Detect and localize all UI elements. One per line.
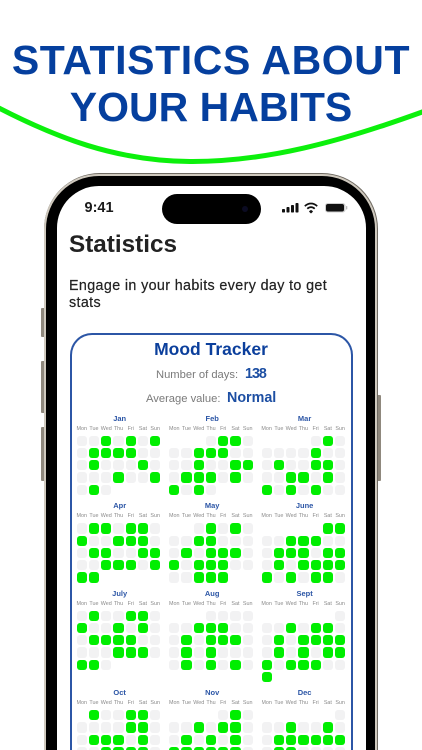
calendar: February: Sun (243, 426, 253, 432)
intro text: Engage in your habits every day to get (69, 278, 327, 294)
camera lens (242, 206, 248, 212)
calendar: January: Sat (139, 426, 147, 432)
calendar: July: July (112, 589, 127, 598)
calendar: July: Thu (114, 601, 123, 607)
calendar: April: Wed (101, 513, 112, 519)
calendar: June: Wed (286, 513, 297, 519)
calendar: June: Tue (274, 513, 283, 519)
calendar: August (169, 589, 253, 670)
calendar: February: Thu (206, 426, 216, 432)
calendar: April: Tue (89, 513, 99, 519)
calendar: March: Mar (298, 414, 311, 423)
number of days value: 138 (245, 366, 266, 382)
calendar: January: Thu (114, 426, 123, 432)
calendar: November: Thu (206, 700, 216, 706)
left side button: volume up (41, 361, 46, 413)
calendar: November: Wed (193, 700, 204, 706)
calendar: November: Sat (231, 700, 240, 706)
calendar: January: Mon (76, 426, 87, 432)
calendar: November: Mon (169, 700, 179, 706)
calendar: September: Wed (286, 601, 297, 607)
calendar: January: Wed (101, 426, 112, 432)
calendar: August: Sun (243, 601, 253, 607)
calendar: April: Fri (128, 513, 134, 519)
calendar: July: Sun (150, 601, 160, 607)
calendar: June (261, 501, 345, 583)
calendar: April (76, 501, 160, 583)
calendar: January: Sun (150, 426, 160, 432)
calendar: May: Wed (193, 513, 204, 519)
heading line 2: YOUR HABITS (70, 84, 352, 130)
intro text (69, 278, 327, 311)
average value label: Average value: (146, 393, 220, 405)
calendar: August: Tue (182, 601, 191, 607)
calendar: February (169, 414, 253, 495)
calendar: June: Sun (335, 513, 345, 519)
black bezel (46, 176, 375, 750)
calendar: March: Wed (286, 426, 297, 432)
calendar: October: Sun (150, 700, 160, 706)
calendar: December: Sat (324, 700, 332, 706)
calendar: September: Sun (335, 601, 345, 607)
calendar: February: Tue (182, 426, 191, 432)
calendar: May: Thu (206, 513, 216, 519)
metal band (44, 174, 377, 750)
calendar: March: Fri (312, 426, 319, 432)
calendar: August: Wed (193, 601, 204, 607)
dynamic island (162, 194, 260, 224)
calendar: December: Tue (274, 700, 283, 706)
calendar: May: Mon (169, 513, 179, 519)
calendar: October: Fri (128, 700, 134, 706)
calendar: August: Fri (220, 601, 226, 607)
calendar: December: Fri (312, 700, 319, 706)
average value: Normal (227, 390, 276, 406)
calendar: June: Mon (261, 513, 272, 519)
calendar: September: Fri (312, 601, 319, 607)
calendar: August: Thu (206, 601, 216, 607)
calendar: August: Aug (205, 589, 219, 598)
panel: mood tracker card (70, 332, 353, 750)
calendar: January: Fri (128, 426, 134, 432)
calendar: February: Feb (206, 414, 219, 423)
calendar: March (261, 414, 345, 495)
calendar: May: Fri (220, 513, 226, 519)
calendar: December: Dec (298, 688, 311, 697)
calendar: December (262, 688, 345, 750)
status bar time: 9:41 (84, 200, 114, 216)
calendar: October: Sat (139, 700, 147, 706)
right side button (376, 395, 381, 481)
icon: signal (282, 203, 298, 212)
calendar: January (76, 414, 160, 495)
calendar: September: Mon (261, 601, 272, 607)
calendar: September: Thu (299, 601, 308, 607)
calendar: October: Mon (77, 700, 87, 706)
calendar: July: Wed (101, 601, 112, 607)
calendar: August: Mon (169, 601, 179, 607)
left side button: volume down (41, 427, 46, 481)
calendar: March: Sun (335, 426, 345, 432)
calendar: October: Thu (114, 700, 123, 706)
calendar: October: Oct (113, 688, 126, 697)
calendar: May: Sun (243, 513, 253, 519)
screen title: Statistics (69, 231, 177, 258)
green curve (0, 106, 422, 164)
calendar: September: Sat (324, 601, 332, 607)
calendar: May: May (205, 501, 219, 510)
calendar: April: Apr (113, 501, 126, 510)
calendar: March: Thu (299, 426, 308, 432)
calendar: October (77, 688, 160, 750)
calendar: November: Sun (243, 700, 253, 706)
icon: wifi (305, 204, 317, 212)
calendar: April: Sat (139, 513, 147, 519)
icon: battery (325, 203, 347, 212)
calendar: November: Fri (220, 700, 226, 706)
calendar: December: Mon (262, 700, 272, 706)
calendar: June: Sat (324, 513, 332, 519)
calendar: December: Wed (286, 700, 297, 706)
calendar: May: Sat (231, 513, 240, 519)
calendar: February: Fri (220, 426, 226, 432)
calendar: November: Tue (182, 700, 191, 706)
calendar: January: Jan (113, 414, 126, 423)
calendar: January: Tue (89, 426, 99, 432)
calendar: April: Thu (114, 513, 123, 519)
intro text: stats (69, 295, 101, 311)
calendar: April: Mon (76, 513, 87, 519)
calendar: May: Tue (182, 513, 191, 519)
calendar: March: Tue (274, 426, 283, 432)
calendar: June: Fri (312, 513, 319, 519)
calendar: September: Tue (274, 601, 283, 607)
calendar: November (169, 688, 253, 750)
status icons (282, 202, 348, 214)
calendar: September: Sept (296, 589, 313, 598)
calendar: July: Mon (76, 601, 87, 607)
calendar: June: June (296, 501, 313, 510)
left side button: silent (41, 308, 46, 337)
calendar: April: Sun (150, 513, 160, 519)
calendar: October: Tue (89, 700, 99, 706)
phone screen (56, 186, 366, 750)
calendar: December: Thu (299, 700, 308, 706)
calendar: December: Sun (335, 700, 345, 706)
calendar: February: Mon (169, 426, 179, 432)
calendar: March: Sat (324, 426, 332, 432)
calendar: February: Wed (193, 426, 204, 432)
calendar: July: Sat (139, 601, 147, 607)
card heading: Mood Tracker (154, 339, 268, 359)
calendar: November: Nov (205, 688, 219, 697)
calendar: July: Fri (128, 601, 134, 607)
calendar: June: Thu (299, 513, 308, 519)
calendar: July (76, 589, 160, 670)
heading line 1: STATISTICS ABOUT (12, 37, 410, 83)
calendar: October: Wed (101, 700, 112, 706)
calendar: February: Sat (231, 426, 240, 432)
calendar: March: Mon (261, 426, 272, 432)
calendar: August: Sat (231, 601, 240, 607)
calendar: September (261, 589, 345, 682)
calendar: May (169, 501, 253, 583)
calendar: July: Tue (89, 601, 99, 607)
phone frame (44, 173, 378, 750)
number of days label: Number of days: (156, 369, 238, 381)
